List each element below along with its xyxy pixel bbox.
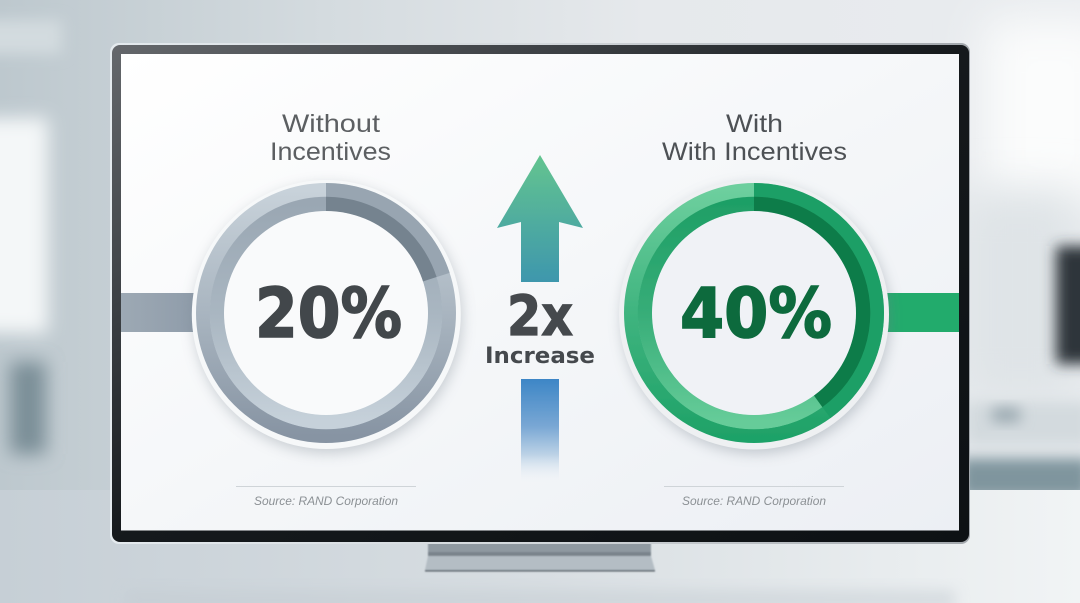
left heading: Without Incentives: Without	[282, 110, 380, 138]
monitor stand	[425, 543, 655, 572]
monitor frame	[110, 43, 970, 544]
green connector bar	[884, 293, 959, 332]
upward arrow	[497, 155, 583, 282]
right source note: Source: RAND Corporation	[682, 496, 826, 508]
value 40%: 40%	[680, 274, 832, 354]
arrow lower shaft	[521, 379, 559, 484]
right heading: With With Incentives: With	[726, 110, 783, 138]
right heading: With With Incentives: With Incentives	[662, 138, 847, 166]
label: Increase: Increase	[485, 344, 595, 369]
right heading: With With Incentives	[662, 110, 847, 166]
grey connector bar	[121, 293, 196, 332]
multiplier: 2x: 2x	[507, 284, 573, 348]
left source note: Source: RAND Corporation	[254, 496, 398, 508]
left heading: Without Incentives	[270, 110, 391, 166]
right donut: 40%	[619, 180, 890, 453]
left donut: 20%	[192, 180, 462, 453]
screen panel	[121, 54, 959, 530]
left heading: Without Incentives: Incentives	[270, 138, 391, 166]
value 20%: 20%	[255, 274, 402, 354]
